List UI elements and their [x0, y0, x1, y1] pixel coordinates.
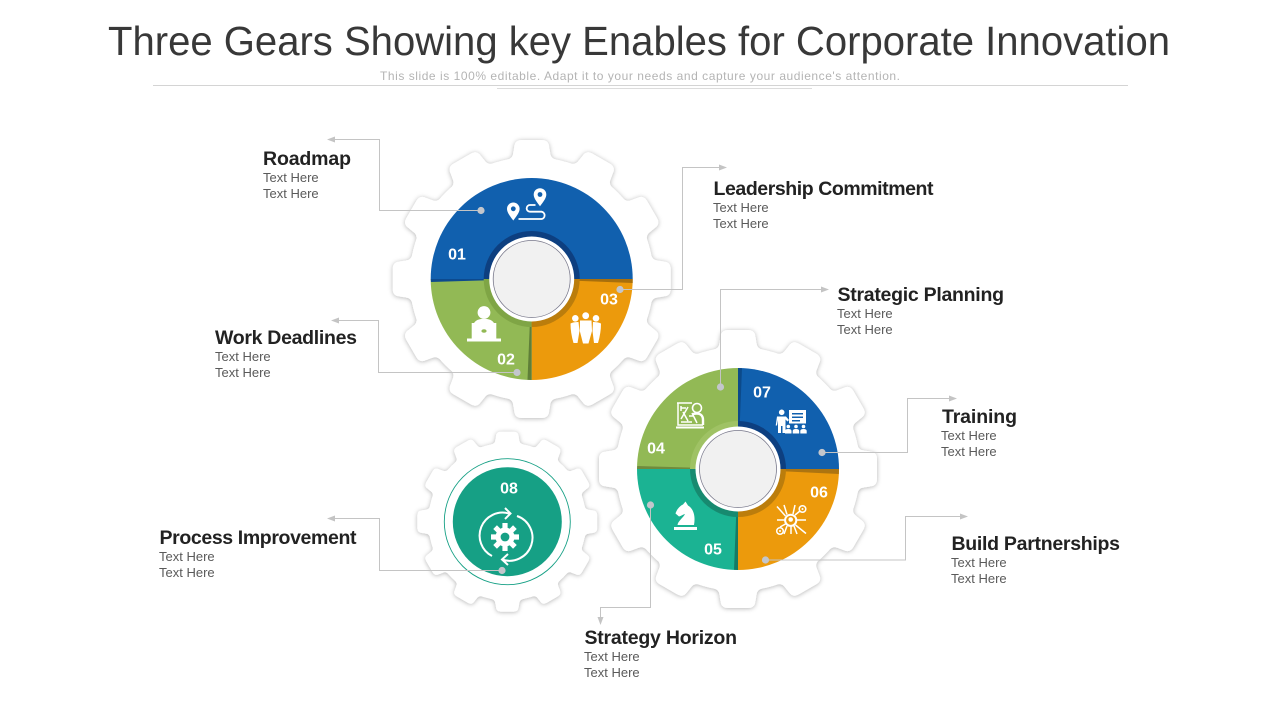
label: leadership commitment: Leadership Commitment: [714, 178, 934, 200]
label: process improvement: Text Here: [159, 565, 215, 580]
icon: team of three people: [570, 312, 601, 344]
label: leadership commitment: Text Here: [713, 216, 769, 231]
gear 2 numbers: 05: [704, 542, 722, 558]
gear 1 numbers: [448, 246, 618, 368]
label: strategy horizon: Text Here: [584, 649, 640, 664]
label: work deadlines: Work Deadlines: [215, 327, 357, 349]
gear 3 background: [417, 432, 597, 612]
connector: training: [818, 396, 957, 456]
connector: strategy horizon: [598, 501, 654, 625]
label: build partnerships: [951, 533, 1120, 586]
connector: strategic planning: [717, 286, 829, 391]
label: training: Text Here: [941, 444, 997, 459]
segment 02 green: [431, 279, 532, 380]
label: leadership commitment: [713, 178, 934, 231]
label: strategy horizon: [584, 627, 737, 680]
gear 1 numbers: 03: [600, 292, 618, 308]
label: strategy horizon: Text Here: [584, 665, 640, 680]
label: process improvement: Process Improvement: [160, 527, 357, 549]
icon: partnership network: [777, 505, 806, 534]
label: roadmap: Roadmap: [263, 148, 351, 170]
segment 07 blue: [738, 368, 839, 469]
label: work deadlines: Text Here: [215, 365, 271, 380]
segment 03 orange: [532, 279, 633, 380]
icon: person at laptop: [467, 306, 501, 342]
connector: work deadlines: [331, 318, 521, 376]
connector: process improvement: [327, 516, 506, 574]
gear 2 numbers: 07: [753, 384, 771, 402]
label: process improvement: [159, 527, 357, 580]
connector: build partnerships: [762, 514, 968, 564]
icon: trainer with presentation board: [776, 410, 807, 434]
icon: roadmap pins: [507, 188, 546, 220]
gear 2 numbers: 06: [810, 484, 828, 502]
label: training: Training: [942, 406, 1017, 428]
gear 3 disc: segment 08: [444, 459, 570, 585]
gear 2 background: [599, 330, 877, 608]
segment 05 teal: [637, 469, 738, 570]
label: roadmap: Text Here: [263, 170, 319, 185]
gear 1 pie: segments 01 02 03: [431, 178, 633, 380]
gear 2 pie: segments 04 05 06 07: [637, 368, 839, 570]
label: build partnerships: Text Here: [951, 555, 1007, 570]
connector: roadmap: [327, 136, 485, 214]
gear 1 numbers: 02: [497, 352, 515, 368]
label: training: [941, 406, 1017, 459]
title: Three Gears Showing key Enables for Corporate Innovation: [108, 18, 1170, 64]
icon: strategy board: [676, 403, 704, 428]
label: strategy horizon: Strategy Horizon: [584, 627, 737, 649]
label: leadership commitment: Text Here: [713, 200, 769, 215]
gear 2 numbers: [647, 384, 828, 558]
segment 06 orange: [738, 469, 839, 570]
label: strategic planning: Text Here: [837, 322, 893, 337]
segment 04 green: [637, 368, 738, 469]
icon: rotating gear: [480, 508, 532, 565]
label: build partnerships: Text Here: [951, 571, 1007, 586]
label: strategic planning: [837, 284, 1004, 337]
gear 3 number: 08: [500, 480, 518, 498]
label: training: Text Here: [941, 428, 997, 443]
label: roadmap: [263, 148, 351, 201]
connector: leadership commitment: [616, 164, 727, 293]
segment 01 blue: [431, 178, 633, 279]
gear 1 numbers: 01: [448, 246, 466, 264]
subtitle: This slide is 100% editable. Adapt it to your needs and capture your audience's attention.: [380, 69, 900, 83]
label: strategic planning: Strategic Planning: [838, 284, 1004, 306]
label: work deadlines: Text Here: [215, 349, 271, 364]
gear 1 background: [393, 140, 671, 418]
icon: chess knight: [674, 502, 697, 530]
gear 2 numbers: 04: [647, 440, 665, 458]
label: work deadlines: [215, 327, 357, 380]
label: process improvement: Text Here: [159, 549, 215, 564]
label: build partnerships: Build Partnerships: [952, 533, 1120, 555]
label: roadmap: Text Here: [263, 186, 319, 201]
label: strategic planning: Text Here: [837, 306, 893, 321]
